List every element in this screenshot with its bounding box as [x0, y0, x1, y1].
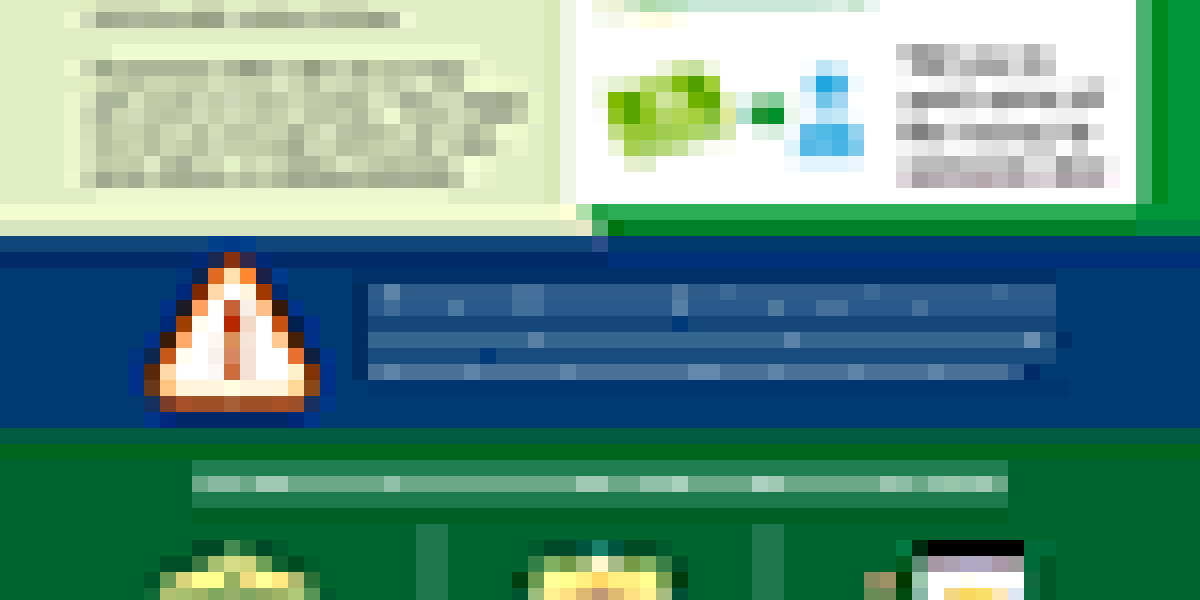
text block: left panel paragraph [64, 44, 544, 204]
panel: blue warning banner [0, 236, 1200, 428]
icon: third bottom icon [864, 540, 1056, 600]
panel: left explanatory panel [0, 0, 576, 236]
text block: warning message [368, 284, 1072, 380]
icon: second bottom icon [512, 540, 688, 600]
heading: right card title [592, 0, 880, 28]
icon: green leaf blob [592, 60, 736, 172]
divider: column separators [416, 524, 784, 600]
heading: left panel text line [64, 0, 416, 28]
icon: warning triangle [128, 236, 336, 428]
icon: blue person [784, 60, 864, 172]
arrow: green connector [736, 92, 800, 140]
heading: bottom section title [192, 460, 1008, 508]
panel: right white card [560, 0, 1200, 236]
panel: green bottom section [0, 428, 1200, 600]
icon: first bottom icon [144, 540, 336, 600]
text block: right card gray caption [896, 44, 1120, 188]
